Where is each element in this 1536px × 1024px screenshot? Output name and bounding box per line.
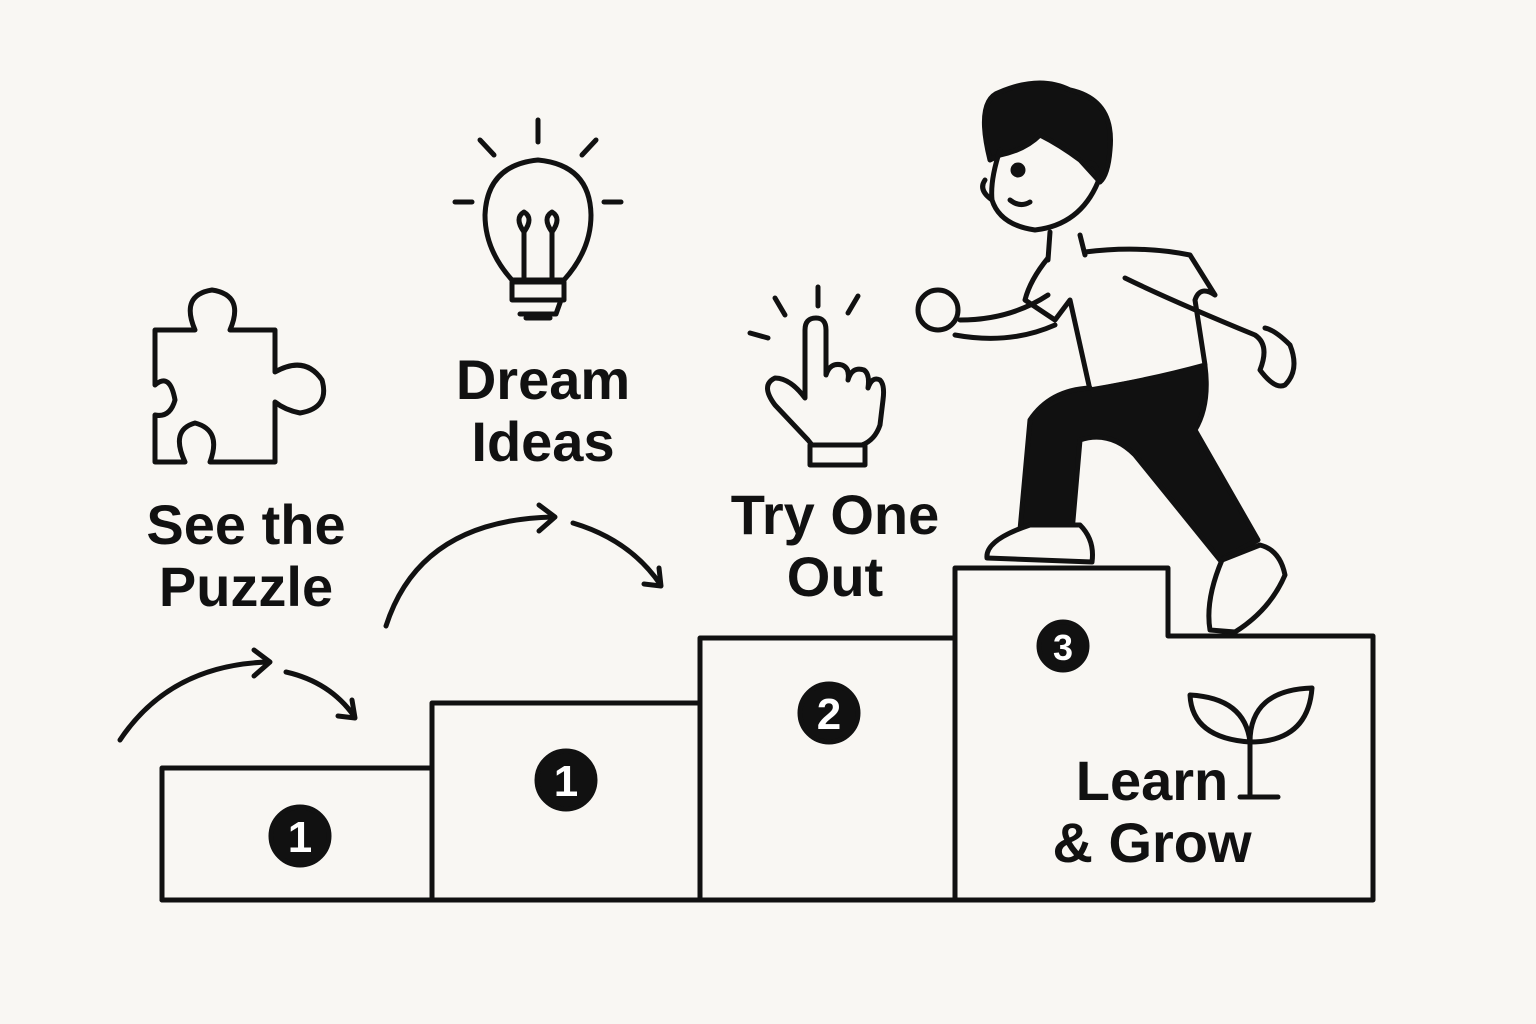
- text: Try One Out: [731, 483, 939, 608]
- text: Try One Out: Try One: [731, 483, 939, 546]
- arrows lower: [120, 650, 355, 740]
- text: Dream Ideas: Ideas: [471, 410, 615, 473]
- number badge 2: 2: [817, 690, 841, 739]
- text: Try One Out: Out: [787, 545, 883, 608]
- icon: sprout: [1190, 688, 1312, 797]
- icon: pointing hand: [750, 287, 884, 465]
- boy character: [918, 83, 1294, 632]
- number badge 1: [271, 807, 329, 865]
- arrows upper: [386, 505, 661, 626]
- text: See the Puzzle: Puzzle: [159, 555, 333, 618]
- icon: puzzle piece: [155, 290, 324, 462]
- number badge 1: 1: [288, 813, 312, 862]
- staircase: [162, 568, 1373, 900]
- text: See the Puzzle: [146, 493, 346, 618]
- number badge 2: [800, 684, 858, 742]
- text: Dream Ideas: Dream: [456, 348, 630, 411]
- number badge 3: [1039, 622, 1087, 670]
- text: See the Puzzle: See the: [146, 493, 346, 556]
- text: Learn & Grow: Learn: [1076, 749, 1228, 812]
- text: Dream Ideas: [456, 348, 630, 473]
- text: Learn & Grow: & Grow: [1052, 811, 1252, 874]
- icon: light bulb: [455, 120, 621, 318]
- number badge 1 second: 1: [554, 757, 578, 806]
- number badge 1 second: [537, 751, 595, 809]
- text: Learn & Grow: [1052, 749, 1252, 874]
- number badge 3: 3: [1053, 627, 1073, 668]
